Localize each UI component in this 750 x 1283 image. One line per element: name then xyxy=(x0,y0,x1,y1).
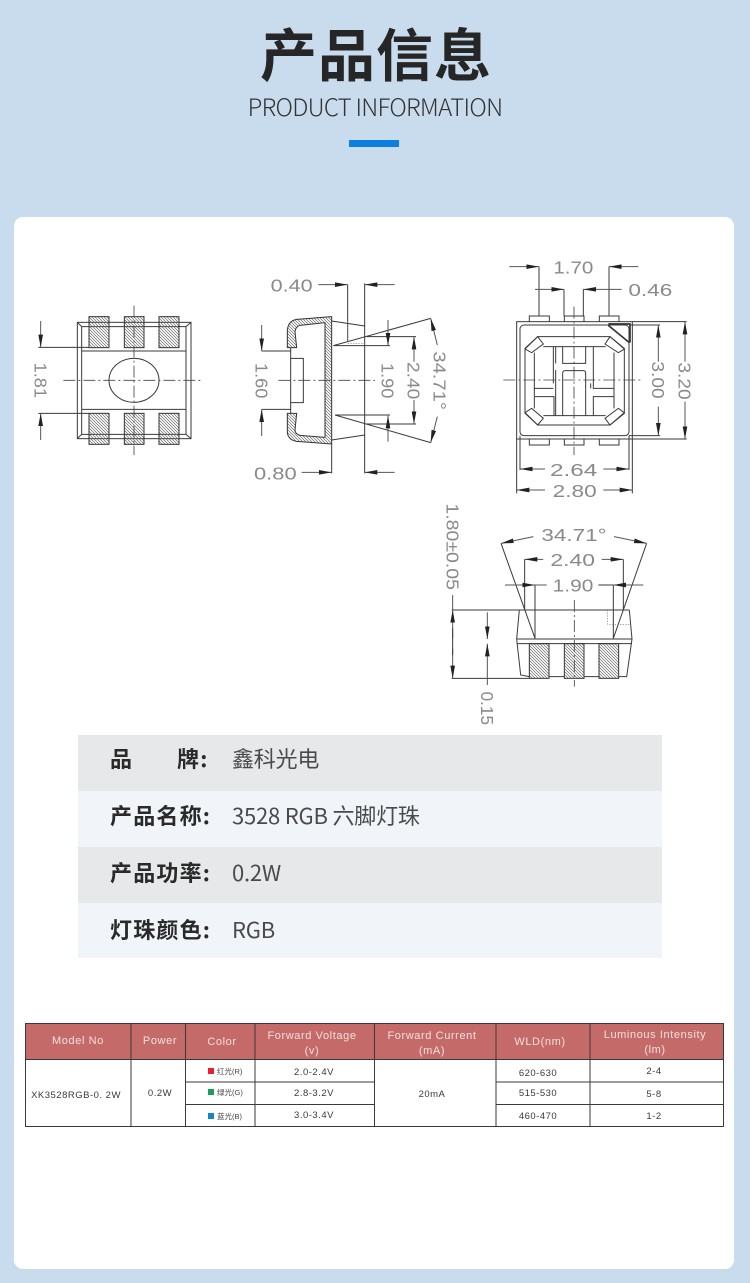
labels front view: 1.80±0.05 xyxy=(442,503,462,590)
labels top view: 1.70 xyxy=(553,257,593,277)
table header xyxy=(25,1023,724,1059)
labels top view: 3.00 xyxy=(648,361,668,399)
labels side view xyxy=(251,275,450,483)
labels top view: 3.20 xyxy=(675,362,695,400)
colour key: 红光(R) xyxy=(217,1066,243,1076)
table body: 5-8 xyxy=(646,1089,662,1100)
colour key xyxy=(208,1066,243,1121)
labels top view: 2.80 xyxy=(553,481,597,501)
colour key: 绿光(G) xyxy=(217,1087,243,1097)
colour key: 蓝光(B) xyxy=(217,1111,242,1121)
labels front view: 34.71° xyxy=(541,525,607,545)
label 1.81: 1.81 xyxy=(30,363,50,398)
row: colour xyxy=(78,903,662,958)
header labels: Color xyxy=(207,1036,237,1048)
row: product name: 产品名称: xyxy=(110,799,211,831)
header labels: Luminous Intensity xyxy=(604,1029,706,1041)
labels top view: 2.64 xyxy=(550,460,597,480)
row: colour: 灯珠颜色: xyxy=(110,913,211,945)
row: power: 产品功率: xyxy=(110,856,211,888)
header labels: Forward Voltage xyxy=(267,1030,357,1042)
labels side view: 1.60 xyxy=(251,363,271,398)
row: power: 0.2W xyxy=(232,856,281,888)
header labels: (mA) xyxy=(419,1045,445,1057)
table body xyxy=(31,1066,662,1122)
table body: 1-2 xyxy=(646,1111,662,1122)
panel: white card xyxy=(14,217,734,1269)
table body: 620-630 xyxy=(519,1068,557,1079)
labels front view: 2.40 xyxy=(550,550,595,570)
table body: 2.0-2.4V xyxy=(294,1067,334,1078)
table body: 0.2W xyxy=(148,1088,172,1099)
labels front view: 0.15 xyxy=(477,692,497,725)
header labels: Forward Current xyxy=(387,1030,477,1042)
row: colour: RGB xyxy=(232,913,275,945)
table body: 20mA xyxy=(419,1089,446,1100)
labels side view: 1.90 xyxy=(378,363,398,398)
title: 产品信息 xyxy=(260,11,492,93)
header labels xyxy=(52,1029,706,1057)
header labels: (lm) xyxy=(644,1044,666,1056)
table body: 460-470 xyxy=(519,1111,557,1122)
hatched shell xyxy=(287,317,332,444)
table body: 2-4 xyxy=(646,1066,662,1077)
row: product name: 3528 RGB 六脚灯珠 xyxy=(232,799,420,831)
hatched pins xyxy=(529,644,619,678)
labels top view xyxy=(550,257,695,501)
spec table xyxy=(25,1023,724,1127)
table body: 3.0-3.4V xyxy=(294,1110,334,1121)
labels top view: 0.46 xyxy=(628,280,672,300)
drawing: front view xyxy=(442,503,647,725)
drawing: top view xyxy=(503,257,695,501)
accent bar xyxy=(349,140,399,147)
header labels: Power xyxy=(143,1035,177,1047)
row: product name xyxy=(78,791,662,847)
drawing: side view xyxy=(251,275,450,483)
hatched pads xyxy=(89,317,179,444)
table body: XK3528RGB-0. 2W xyxy=(31,1090,121,1101)
labels side view: 34.71° xyxy=(430,351,450,410)
header labels: (v) xyxy=(305,1045,319,1057)
row: power xyxy=(78,847,662,903)
row: brand xyxy=(78,735,662,791)
row: brand: 鑫科光电 xyxy=(232,742,319,774)
labels side view: 0.80 xyxy=(254,463,297,483)
row: brand: 品 xyxy=(110,742,133,774)
labels front view xyxy=(442,503,607,725)
labels front view: 1.90 xyxy=(553,576,593,596)
header labels: WLD(nm) xyxy=(514,1036,566,1048)
table body: 515-530 xyxy=(519,1088,557,1099)
subtitle: PRODUCT INFORMATION xyxy=(248,88,502,123)
labels side view: 2.40 xyxy=(404,362,424,399)
drawing: bottom view xyxy=(30,306,202,455)
table body: 2.8-3.2V xyxy=(294,1088,334,1099)
row: brand: 牌: xyxy=(177,742,209,774)
labels side view: 0.40 xyxy=(271,275,313,295)
header labels: Model No xyxy=(52,1035,104,1047)
